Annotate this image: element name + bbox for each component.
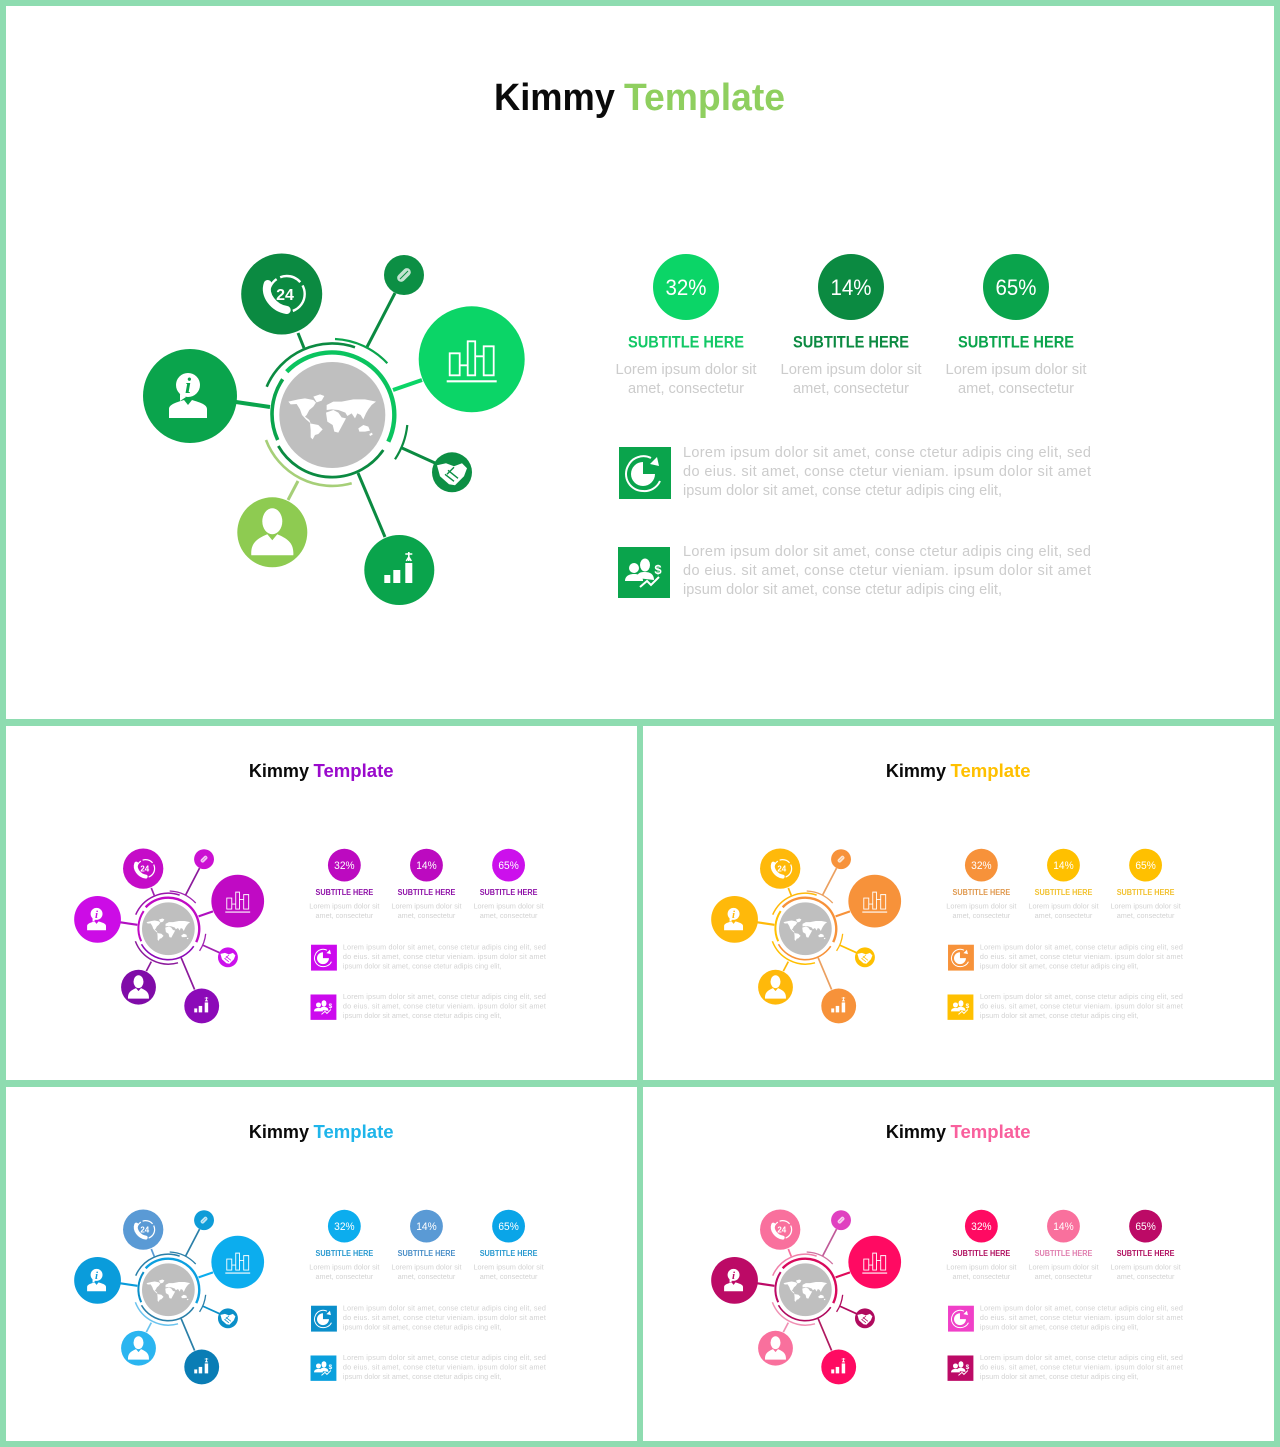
stats pink: Lorem ipsum dolor sit: [946, 1262, 1016, 1271]
text rows purple: do eius. sit amet, conse ctetur vieniam. ipsum dolor sit amet: [343, 952, 546, 961]
icon: paper clip: [384, 255, 424, 295]
icon: people and money square: [618, 547, 670, 598]
stats purple: SUBTITLE HERE: [480, 888, 538, 897]
title purple: Kimmy: [249, 761, 309, 782]
title: [494, 77, 785, 119]
text rows blue: ipsum dolor sit amet, conse ctetur adipis cing elit,: [343, 1372, 502, 1381]
stats pink: SUBTITLE HERE: [953, 1249, 1011, 1258]
stats blue: amet, consectetur: [480, 1272, 538, 1281]
icon: person: [237, 497, 307, 567]
stats pink: 65%: [1135, 1221, 1156, 1233]
stats blue: SUBTITLE HERE: [316, 1249, 374, 1258]
stats blue: Lorem ipsum dolor sit: [473, 1262, 544, 1271]
title: Kimmy: [494, 77, 615, 119]
stats orange: 65%: [1135, 860, 1156, 872]
stats blue: [309, 1210, 544, 1281]
stat: 65%: 65%: [996, 275, 1036, 300]
stats purple: amet, consectetur: [316, 911, 374, 920]
hub diagram purple: 24: [140, 865, 150, 874]
hub diagram pink: [711, 1209, 901, 1384]
text rows pink: do eius. sit amet, conse ctetur vieniam. ipsum dolor sit amet: [980, 1313, 1183, 1322]
text rows pink: Lorem ipsum dolor sit amet, conse ctetur adipis cing elit, sed: [980, 1304, 1183, 1313]
stats pink: amet, consectetur: [1035, 1272, 1093, 1281]
hub diagram pink: i: [732, 1270, 735, 1282]
stat: 32%: SUBTITLE HERE: [628, 334, 744, 352]
stats purple: amet, consectetur: [480, 911, 538, 920]
title orange: Template: [951, 761, 1031, 782]
stats blue: amet, consectetur: [316, 1272, 374, 1281]
stats orange: Lorem ipsum dolor sit: [1028, 901, 1099, 910]
text rows blue: [311, 1304, 546, 1381]
text block 2: do eius. sit amet, conse ctetur vieniam. ipsum dolor sit amet: [683, 563, 1091, 579]
text rows purple: ipsum dolor sit amet, conse ctetur adipis cing elit,: [343, 1011, 502, 1020]
text rows orange: do eius. sit amet, conse ctetur vieniam. ipsum dolor sit amet: [980, 952, 1183, 961]
title blue: Kimmy: [249, 1122, 309, 1143]
icon: 24 hour phone: [241, 254, 322, 334]
stats blue: SUBTITLE HERE: [398, 1249, 456, 1258]
hub diagram pink: 24: [777, 1226, 787, 1235]
icon: bar chart: [419, 306, 525, 412]
icon: 24 hour phone: 24: [276, 287, 294, 304]
stats purple: [309, 849, 544, 920]
stats pink: [946, 1210, 1181, 1281]
title: Template: [624, 77, 785, 119]
stats purple: 65%: [498, 860, 519, 872]
stats orange: amet, consectetur: [953, 911, 1011, 920]
text rows pink: ipsum dolor sit amet, conse ctetur adipis cing elit,: [980, 1372, 1139, 1381]
text rows blue: Lorem ipsum dolor sit amet, conse ctetur adipis cing elit, sed: [343, 1353, 546, 1362]
stats orange: SUBTITLE HERE: [1035, 888, 1093, 897]
stats orange: 14%: [1053, 860, 1074, 872]
text block 2: [683, 544, 1091, 598]
text rows pink: do eius. sit amet, conse ctetur vieniam. ipsum dolor sit amet: [980, 1362, 1183, 1371]
stat: 65%: SUBTITLE HERE: [958, 334, 1074, 352]
hub diagram: [143, 254, 525, 605]
text rows blue: do eius. sit amet, conse ctetur vieniam. ipsum dolor sit amet: [343, 1362, 546, 1371]
stat: 65%: amet, consectetur: [958, 381, 1074, 397]
text block 1: Lorem ipsum dolor sit amet, conse ctetur adipis cing elit, sed: [683, 445, 1091, 461]
stats blue: Lorem ipsum dolor sit: [391, 1262, 462, 1271]
hub diagram purple: [74, 848, 264, 1023]
hub diagram blue: i: [95, 1270, 98, 1282]
text rows purple: do eius. sit amet, conse ctetur vieniam. ipsum dolor sit amet: [343, 1001, 546, 1010]
text rows blue: ipsum dolor sit amet, conse ctetur adipis cing elit,: [343, 1323, 502, 1332]
text rows orange: Lorem ipsum dolor sit amet, conse ctetur adipis cing elit, sed: [980, 992, 1183, 1001]
icon: pie chart square: [619, 447, 671, 499]
text block 2: Lorem ipsum dolor sit amet, conse ctetur adipis cing elit, sed: [683, 544, 1091, 560]
stats pink: Lorem ipsum dolor sit: [1110, 1262, 1181, 1271]
icon: people and money square: $: [654, 562, 662, 577]
text rows pink: $: [966, 1364, 970, 1371]
text rows orange: do eius. sit amet, conse ctetur vieniam. ipsum dolor sit amet: [980, 1001, 1183, 1010]
text block 1: [683, 445, 1091, 499]
text rows orange: [948, 943, 1183, 1020]
globe: [279, 362, 385, 468]
icon: growth chart: [364, 535, 434, 605]
icon: information person: i: [185, 373, 192, 398]
stat: 32%: Lorem ipsum dolor sit: [616, 362, 756, 378]
stat: 14%: [780, 254, 922, 397]
stats orange: amet, consectetur: [1035, 911, 1093, 920]
stats purple: Lorem ipsum dolor sit: [391, 901, 462, 910]
panel: blue slide: [6, 1087, 637, 1441]
text rows blue: Lorem ipsum dolor sit amet, conse ctetur adipis cing elit, sed: [343, 1304, 546, 1313]
hub diagram blue: [74, 1209, 264, 1384]
icon: information person: [143, 349, 237, 443]
stat: 65%: Lorem ipsum dolor sit: [946, 362, 1086, 378]
stats blue: 14%: [416, 1221, 437, 1233]
stat: 14%: SUBTITLE HERE: [793, 334, 909, 352]
text rows blue: do eius. sit amet, conse ctetur vieniam. ipsum dolor sit amet: [343, 1313, 546, 1322]
text rows purple: Lorem ipsum dolor sit amet, conse ctetur adipis cing elit, sed: [343, 992, 546, 1001]
stats pink: 14%: [1053, 1221, 1074, 1233]
panel: orange slide: [643, 726, 1274, 1080]
stats purple: Lorem ipsum dolor sit: [309, 901, 379, 910]
text rows pink: [948, 1304, 1183, 1381]
panel: main green slide: [6, 6, 1274, 719]
stat: 32%: amet, consectetur: [628, 381, 744, 397]
stats orange: SUBTITLE HERE: [953, 888, 1011, 897]
stats orange: Lorem ipsum dolor sit: [1110, 901, 1181, 910]
stat: 14%: Lorem ipsum dolor sit: [780, 362, 922, 378]
stats purple: SUBTITLE HERE: [398, 888, 456, 897]
stats blue: amet, consectetur: [398, 1272, 456, 1281]
stats orange: [946, 849, 1181, 920]
stats blue: Lorem ipsum dolor sit: [309, 1262, 379, 1271]
hub diagram orange: i: [732, 909, 735, 921]
icon: handshake: [432, 452, 472, 492]
text rows purple: $: [329, 1003, 333, 1010]
stats blue: 32%: [334, 1221, 355, 1233]
hub diagram orange: 24: [777, 865, 787, 874]
hub diagram orange: [711, 848, 901, 1023]
title purple: Template: [314, 761, 394, 782]
stats pink: 32%: [971, 1221, 992, 1233]
stats pink: SUBTITLE HERE: [1035, 1249, 1093, 1258]
title pink: Kimmy: [886, 1122, 946, 1143]
stats pink: amet, consectetur: [1117, 1272, 1175, 1281]
stats purple: 32%: [334, 860, 355, 872]
hub diagram purple: i: [95, 909, 98, 921]
stats blue: 65%: [498, 1221, 519, 1233]
text rows orange: $: [966, 1003, 970, 1010]
text rows orange: Lorem ipsum dolor sit amet, conse ctetur adipis cing elit, sed: [980, 943, 1183, 952]
panel: purple slide: [6, 726, 637, 1080]
panel: pink slide: [643, 1087, 1274, 1441]
title orange: Kimmy: [886, 761, 946, 782]
stats orange: SUBTITLE HERE: [1117, 888, 1175, 897]
text rows pink: ipsum dolor sit amet, conse ctetur adipis cing elit,: [980, 1323, 1139, 1332]
stats pink: amet, consectetur: [953, 1272, 1011, 1281]
text rows blue: $: [329, 1364, 333, 1371]
stats orange: amet, consectetur: [1117, 911, 1175, 920]
title blue: [249, 1122, 394, 1143]
rings: [266, 339, 407, 486]
text rows purple: [311, 943, 546, 1020]
text block 1: ipsum dolor sit amet, conse ctetur adipis cing elit,: [683, 483, 1002, 499]
title blue: Template: [314, 1122, 394, 1143]
stats purple: Lorem ipsum dolor sit: [473, 901, 544, 910]
title pink: Template: [951, 1122, 1031, 1143]
stats pink: SUBTITLE HERE: [1117, 1249, 1175, 1258]
text block 1: do eius. sit amet, conse ctetur vieniam. ipsum dolor sit amet: [683, 464, 1091, 480]
text rows purple: Lorem ipsum dolor sit amet, conse ctetur adipis cing elit, sed: [343, 943, 546, 952]
text rows pink: Lorem ipsum dolor sit amet, conse ctetur adipis cing elit, sed: [980, 1353, 1183, 1362]
title pink: [886, 1122, 1031, 1143]
title orange: [886, 761, 1031, 782]
text rows purple: ipsum dolor sit amet, conse ctetur adipis cing elit,: [343, 962, 502, 971]
stats orange: Lorem ipsum dolor sit: [946, 901, 1016, 910]
text rows orange: ipsum dolor sit amet, conse ctetur adipis cing elit,: [980, 1011, 1139, 1020]
stat: 65%: [946, 254, 1086, 397]
text block 2: ipsum dolor sit amet, conse ctetur adipis cing elit,: [683, 582, 1002, 598]
stats purple: SUBTITLE HERE: [316, 888, 374, 897]
text rows orange: ipsum dolor sit amet, conse ctetur adipis cing elit,: [980, 962, 1139, 971]
stats purple: 14%: [416, 860, 437, 872]
stat: 32%: [616, 254, 756, 397]
title purple: [249, 761, 394, 782]
stats purple: amet, consectetur: [398, 911, 456, 920]
stat: 14%: amet, consectetur: [793, 381, 909, 397]
stats pink: Lorem ipsum dolor sit: [1028, 1262, 1099, 1271]
stat: 32%: 32%: [666, 275, 706, 300]
stats orange: 32%: [971, 860, 992, 872]
connectors: [236, 293, 435, 537]
stat: 14%: 14%: [830, 275, 872, 300]
stats blue: SUBTITLE HERE: [480, 1249, 538, 1258]
hub diagram blue: 24: [140, 1226, 150, 1235]
